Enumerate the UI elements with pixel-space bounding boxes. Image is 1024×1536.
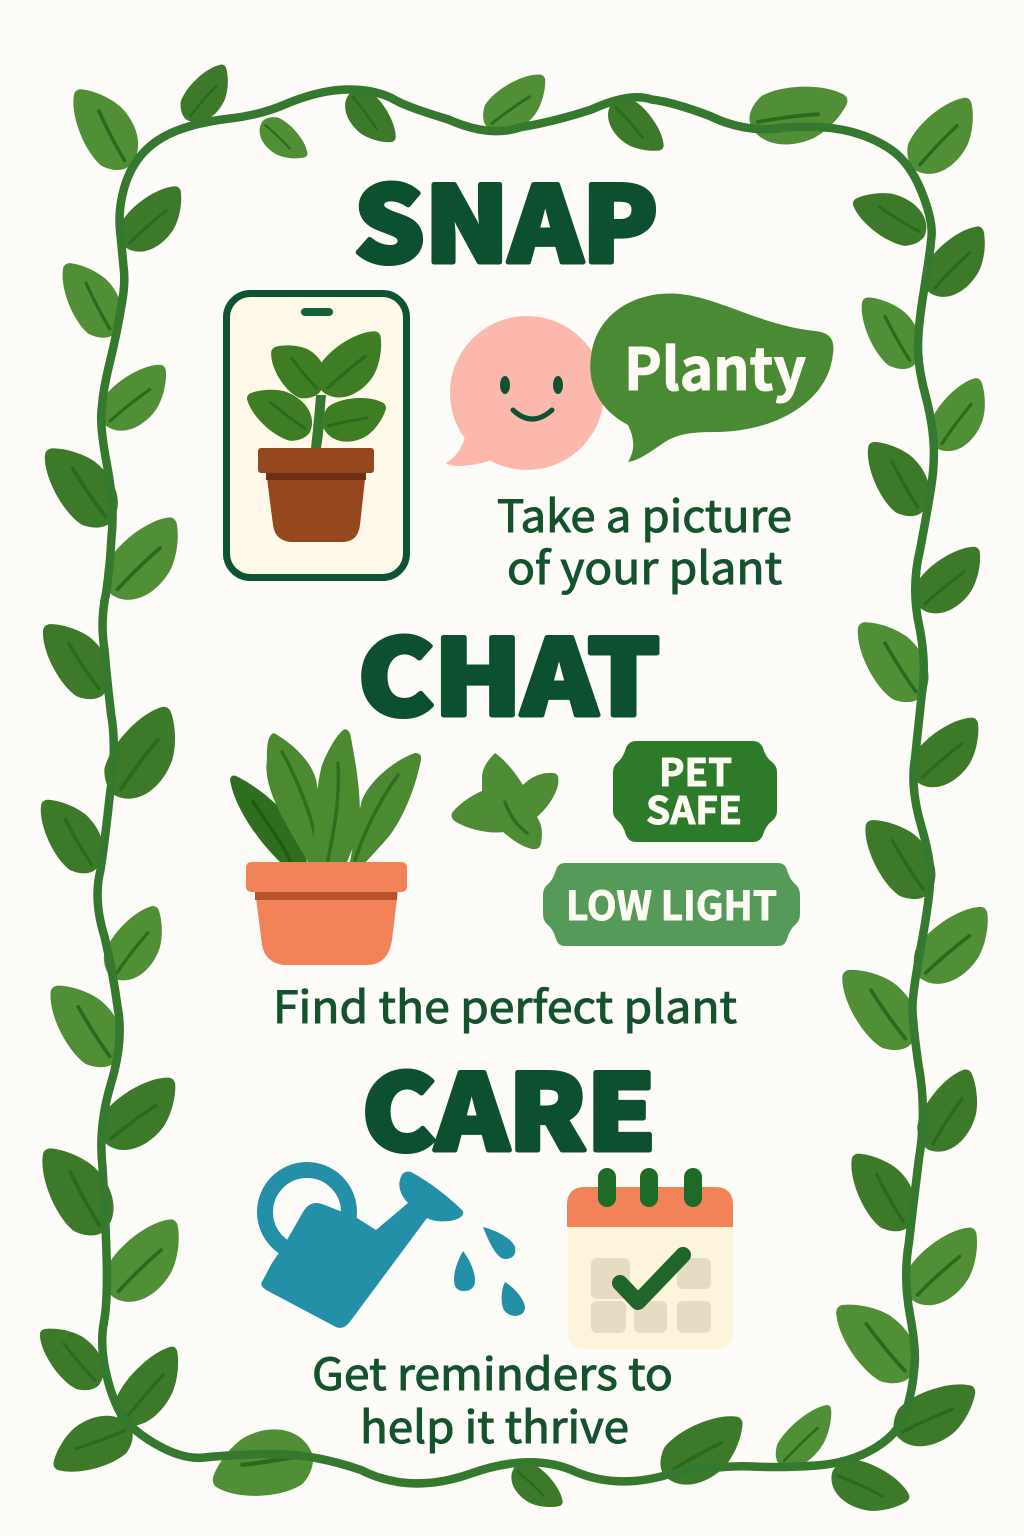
- icon: pink smiling chat bubble: [446, 316, 604, 470]
- text: Take a picture of your plant: of your plant: [507, 533, 782, 597]
- text: Take a picture of your plant: Take a picture: [497, 481, 792, 545]
- icon: small leaf cluster: [452, 753, 558, 849]
- text: Take a picture of your plant: [497, 481, 792, 597]
- icon: calendar with check mark: [567, 1168, 733, 1349]
- heading: SNAP: SNAP: [354, 141, 658, 292]
- green chat bubble: Planty: [590, 293, 833, 462]
- badge: PET SAFE: PET: [659, 742, 732, 797]
- text: Get reminders to help it thrive: Get reminders to: [312, 1339, 673, 1403]
- badge: PET SAFE: [613, 741, 777, 842]
- icon: phone with potted plant: [226, 294, 406, 578]
- green chat bubble: Planty: Planty: [624, 323, 806, 407]
- text: Find the perfect plant: Find the perfect plant: [273, 972, 737, 1036]
- heading: CHAT: CHAT: [358, 594, 660, 745]
- badge: LOW LIGHT: [543, 863, 800, 946]
- badge: LOW LIGHT: LOW LIGHT: [566, 874, 777, 932]
- badge: PET SAFE: SAFE: [646, 780, 742, 835]
- heading: CARE: CARE: [362, 1029, 656, 1180]
- icon: plant in orange pot: [230, 729, 421, 965]
- text: Get reminders to help it thrive: help it thrive: [360, 1392, 629, 1456]
- text: Get reminders to help it thrive: [312, 1339, 673, 1456]
- icon: watering can with drops: [261, 1170, 525, 1328]
